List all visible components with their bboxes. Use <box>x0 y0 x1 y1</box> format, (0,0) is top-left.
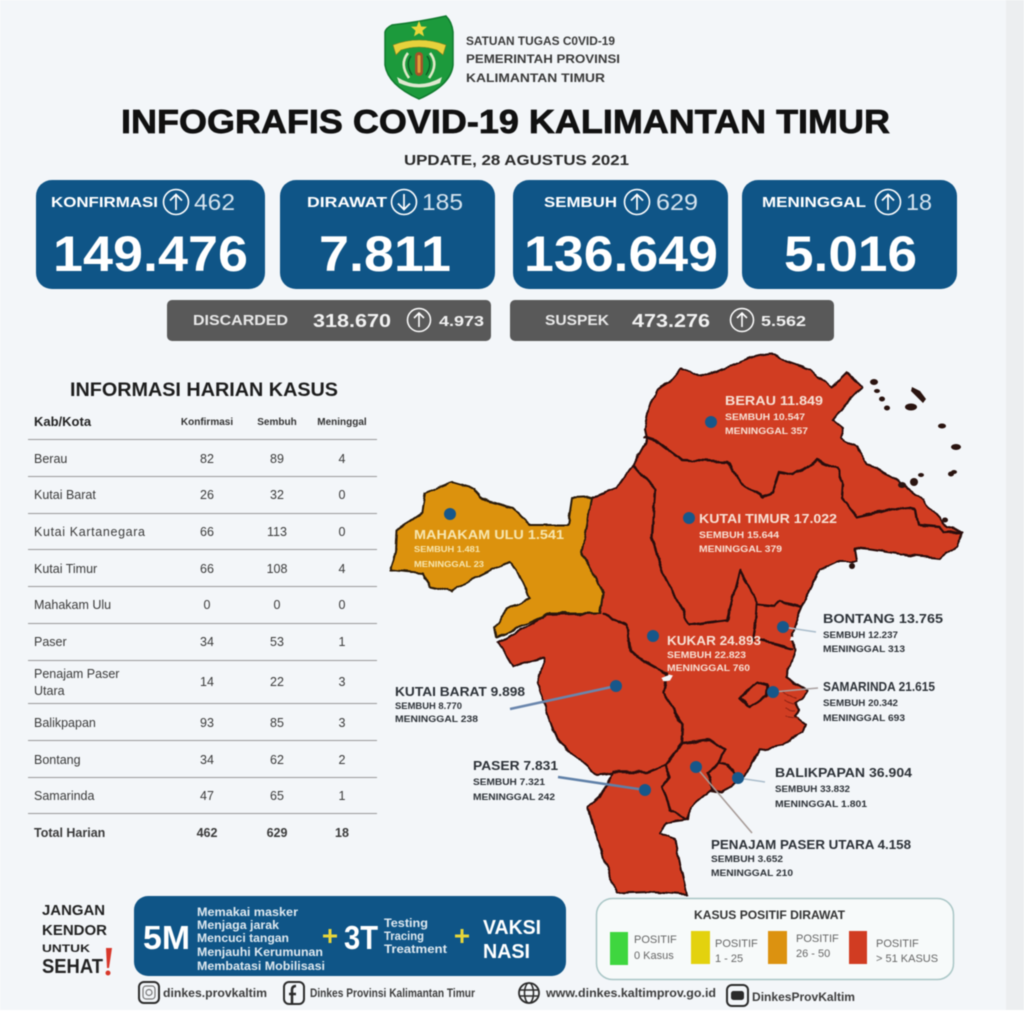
legend: kasus positif dirawat: 1 - 25 <box>715 953 743 965</box>
table: daily cases: Paser <box>34 635 67 649</box>
table: daily cases: Kutai Barat <box>34 488 96 502</box>
footer: facebook: Dinkes Provinsi Kalimantan Timur <box>310 986 475 1000</box>
card: meninggal: 18 <box>906 189 932 215</box>
label: Mahakam Ulu <box>414 527 564 569</box>
panel: 5M + 3T + vaksinasi: 5M <box>143 919 190 956</box>
label: Kukar: SEMBUH 22.823 <box>667 650 746 660</box>
bar: discarded <box>167 300 491 341</box>
label: Kutai Timur <box>699 511 837 554</box>
bar: suspek: 473.276 <box>632 311 710 331</box>
footer: instagram: dinkes.provkaltim <box>163 986 267 1000</box>
label: Balikpapan: SEMBUH 33.832 <box>775 784 850 794</box>
label: Kutai Barat: KUTAI BARAT 9.898 <box>395 684 525 699</box>
panel: 5M + 3T + vaksinasi: Mencuci tangan <box>197 931 289 945</box>
label: Bontang: BONTANG 13.765 <box>823 611 943 626</box>
label: Kutai Timur: SEMBUH 15.644 <box>699 530 779 540</box>
table: daily cases: 22 <box>270 675 284 689</box>
card: dirawat: DIRAWAT <box>307 194 387 211</box>
connector lines <box>510 627 818 833</box>
card: meninggal: MENINGGAL <box>762 194 866 211</box>
card: dirawat: 7.811 <box>319 226 451 282</box>
label: Berau: MENINGGAL 357 <box>725 426 808 436</box>
label: Paser: PASER 7.831 <box>473 758 558 773</box>
bar: suspek: 5.562 <box>761 313 806 330</box>
table: daily cases: 0 <box>274 598 281 612</box>
panel: 5M + 3T + vaksinasi: Memakai masker <box>197 905 298 919</box>
table: daily cases: Utara <box>34 684 65 698</box>
table: daily cases: Penajam Paser <box>34 667 119 681</box>
table: daily cases: Samarinda <box>34 789 94 803</box>
panel: 5M + 3T + vaksinasi: Treatment <box>384 942 447 956</box>
table: daily cases: 1 <box>339 789 346 803</box>
label: Bontang <box>823 611 943 654</box>
table: daily cases: 1 <box>339 635 346 649</box>
label: Samarinda: SAMARINDA 21.615 <box>823 679 935 694</box>
label: Mahakam Ulu: MAHAKAM ULU 1.541 <box>414 527 564 542</box>
card: konfirmasi: 149.476 <box>53 226 248 282</box>
label: Samarinda: SEMBUH 20.342 <box>823 698 898 708</box>
label: Kukar: KUKAR 24.893 <box>667 633 761 648</box>
panel: 5M + 3T + vaksinasi: Menjauhi Kerumunan <box>197 945 323 959</box>
table: daily cases: 65 <box>270 789 284 803</box>
map shapes and borders <box>390 353 963 895</box>
label: Samarinda: MENINGGAL 693 <box>823 713 905 723</box>
label: Paser: MENINGGAL 242 <box>473 792 555 802</box>
header organisation text: PEMERINTAH PROVINSI <box>466 52 620 66</box>
card: sembuh: SEMBUH <box>544 194 617 211</box>
table: daily cases: Total Harian <box>34 826 105 840</box>
table heading: INFORMASI HARIAN KASUS <box>70 380 338 401</box>
card: konfirmasi: KONFIRMASI <box>51 194 158 211</box>
panel: 5M + 3T + vaksinasi: Membatasi Mobilisasi <box>197 959 325 973</box>
update date: UPDATE, 28 AGUSTUS 2021 <box>404 152 629 169</box>
slogan: jangan kendor <box>42 902 112 978</box>
bar: discarded: DISCARDED <box>193 312 288 329</box>
table: daily cases: 0 <box>204 598 211 612</box>
label: Kukar: MENINGGAL 760 <box>667 663 750 673</box>
table: daily cases: Kab/Kota <box>34 414 92 429</box>
card: meninggal <box>742 180 957 289</box>
label: Kutai Timur: KUTAI TIMUR 17.022 <box>699 511 837 526</box>
footer: youtube <box>727 985 855 1006</box>
legend: kasus positif dirawat: POSITIF <box>715 938 758 950</box>
label: Bontang: MENINGGAL 313 <box>823 644 905 654</box>
card: sembuh <box>513 180 728 289</box>
footer: website <box>519 983 716 1003</box>
label: Kutai Barat <box>395 684 525 724</box>
table: daily cases: 4 <box>339 562 346 576</box>
table: daily cases: Kutai Timur <box>34 562 97 576</box>
table: daily cases: 66 <box>200 525 214 539</box>
label: Bontang: SEMBUH 12.237 <box>823 630 898 640</box>
card: sembuh: 136.649 <box>524 226 718 282</box>
logo: provincial shield <box>385 16 453 99</box>
label: Samarinda <box>823 679 935 723</box>
table: daily cases: 93 <box>200 716 214 730</box>
slogan: jangan kendor: JANGAN <box>42 902 105 919</box>
card: dirawat <box>280 180 495 289</box>
header organisation text: SATUAN TUGAS C0VID-19 <box>466 36 615 48</box>
legend: kasus positif dirawat: KASUS POSITIF DIRAWAT <box>694 910 845 922</box>
bar: discarded: 318.670 <box>313 311 391 331</box>
label: Kutai Timur: MENINGGAL 379 <box>699 544 782 554</box>
panel: 5M + 3T + vaksinasi: VAKSI <box>483 917 541 939</box>
panel: 5M + 3T + vaksinasi: NASI <box>483 941 530 963</box>
table: daily cases: Mahakam Ulu <box>34 598 111 612</box>
label: Kukar <box>667 633 761 673</box>
table: daily cases: 108 <box>267 562 287 576</box>
label: Paser: SEMBUH 7.321 <box>473 777 545 787</box>
panel: 5M + 3T + vaksinasi: Testing <box>384 916 428 930</box>
title: INFOGRAFIS COVID-19 KALIMANTAN TIMUR <box>121 103 890 140</box>
card: konfirmasi <box>36 180 265 289</box>
table: daily cases: 34 <box>200 635 214 649</box>
card: dirawat: 185 <box>422 189 463 215</box>
table: daily cases: 14 <box>200 675 214 689</box>
label: Balikpapan: BALIKPAPAN 36.904 <box>775 765 913 780</box>
label: Mahakam Ulu: MENINGGAL 23 <box>414 559 484 569</box>
table: daily cases: 18 <box>335 826 349 840</box>
legend: kasus positif dirawat: 0 Kasus <box>634 950 674 962</box>
table: daily cases: 66 <box>200 562 214 576</box>
label: Penajam Paser Utara: MENINGGAL 210 <box>711 868 793 878</box>
table: daily cases: Balikpapan <box>34 716 96 730</box>
table: daily cases: 4 <box>339 452 346 466</box>
label: Penajam Paser Utara: PENAJAM PASER UTARA 4.158 <box>711 837 911 852</box>
label: Balikpapan: MENINGGAL 1.801 <box>775 799 867 809</box>
table: daily cases: 62 <box>270 753 284 767</box>
legend: kasus positif dirawat: 26 - 50 <box>796 948 830 960</box>
table: daily cases: 26 <box>200 488 214 502</box>
slogan: jangan kendor: KENDOR <box>42 922 107 939</box>
table: daily cases: Sembuh <box>257 417 297 428</box>
map: Kalimantan Timur regions <box>390 353 963 895</box>
footer: website: www.dinkes.kaltimprov.go.id <box>545 986 716 1000</box>
label: Kutai Barat: SEMBUH 8.770 <box>395 701 462 711</box>
label: Penajam Paser Utara: SEMBUH 3.652 <box>711 854 783 864</box>
table: daily cases: 0 <box>339 598 346 612</box>
legend: kasus positif dirawat: POSITIF <box>796 933 839 945</box>
table: daily cases: 85 <box>270 716 284 730</box>
legend: kasus positif dirawat: > 51 KASUS <box>876 953 938 965</box>
label: Kutai Barat: MENINGGAL 238 <box>395 714 478 724</box>
label: Berau: SEMBUH 10.547 <box>725 412 805 422</box>
panel: 5M + 3T + vaksinasi: Tracing <box>384 929 424 943</box>
header organisation text: KALIMANTAN TIMUR <box>466 71 605 85</box>
header organisation text <box>466 36 620 85</box>
card: sembuh: 629 <box>656 189 698 215</box>
card: konfirmasi: 462 <box>194 189 235 215</box>
table: daily cases: 0 <box>339 488 346 502</box>
bar: suspek: SUSPEK <box>545 312 609 329</box>
table: daily cases: 32 <box>270 488 284 502</box>
slogan: jangan kendor: UNTUK <box>42 943 90 955</box>
table: daily cases: 82 <box>200 452 214 466</box>
footer: youtube: DinkesProvKaltim <box>752 990 855 1004</box>
panel: 5M + 3T + vaksinasi <box>134 896 566 976</box>
footer: instagram <box>139 982 267 1003</box>
table: daily cases: Kutai Kartanegara <box>34 525 145 539</box>
table: daily cases: 462 <box>197 826 217 840</box>
bar: discarded: 4.973 <box>439 313 484 330</box>
table: daily cases: 47 <box>200 789 214 803</box>
legend: kasus positif dirawat: POSITIF <box>634 934 677 946</box>
label: Berau: BERAU 11.849 <box>725 393 823 408</box>
table: daily cases <box>28 414 377 840</box>
table: daily cases: 3 <box>339 675 346 689</box>
table: daily cases: Meninggal <box>317 417 367 428</box>
table: daily cases: 3 <box>339 716 346 730</box>
label: Paser <box>473 758 558 802</box>
panel: 5M + 3T + vaksinasi: Menjaga jarak <box>197 918 279 932</box>
table: daily cases: 113 <box>267 525 287 539</box>
table: daily cases: Berau <box>34 452 67 466</box>
table: daily cases: 89 <box>270 452 284 466</box>
bar: suspek <box>510 300 834 341</box>
label: Penajam Paser Utara <box>711 837 911 878</box>
legend: kasus positif dirawat <box>596 898 954 980</box>
islands <box>849 379 961 569</box>
legend: kasus positif dirawat: POSITIF <box>876 938 919 950</box>
label: Balikpapan <box>775 765 913 809</box>
location dots <box>444 416 789 796</box>
table: daily cases: 53 <box>270 635 284 649</box>
table: daily cases: Konfirmasi <box>181 417 233 428</box>
footer: facebook <box>284 982 475 1004</box>
label: Mahakam Ulu: SEMBUH 1.481 <box>414 544 480 554</box>
table: daily cases: 0 <box>339 525 346 539</box>
table: daily cases: 629 <box>267 826 287 840</box>
table: daily cases: 2 <box>339 753 346 767</box>
table: daily cases: 34 <box>200 753 214 767</box>
panel: 5M + 3T + vaksinasi: 3T <box>344 919 378 956</box>
slogan: jangan kendor: SEHAT <box>42 956 103 978</box>
card: meninggal: 5.016 <box>784 226 917 282</box>
label: Berau <box>725 393 823 436</box>
table: daily cases: Bontang <box>34 753 81 767</box>
